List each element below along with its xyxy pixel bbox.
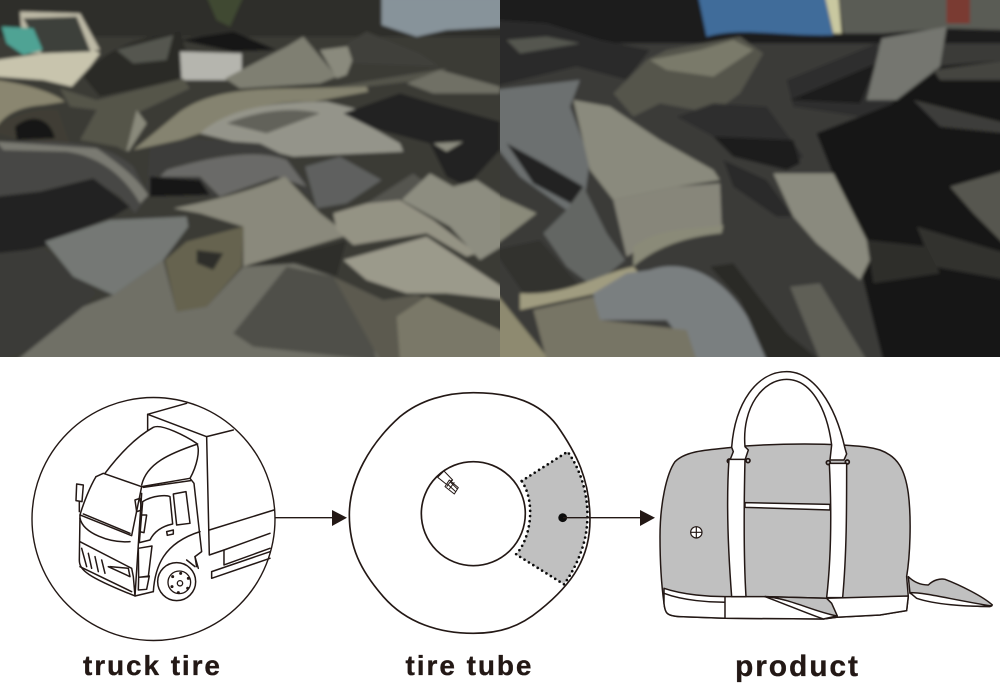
arrow: tire tube to product (558, 510, 655, 526)
cut section, dotted outline (516, 452, 587, 584)
eye button (691, 527, 702, 538)
panel: truck tire (32, 398, 347, 681)
panel: tire tube (349, 393, 655, 681)
photo: pile of used tire tubes (0, 0, 1000, 364)
bag bottom panel (664, 588, 908, 619)
panel: product (660, 372, 992, 683)
icon: truck line drawing (76, 403, 274, 601)
tube inner circle (421, 462, 525, 566)
icon: whale-shaped bag (660, 372, 992, 619)
photo right half (493, 0, 1000, 364)
arrow: truck tire to tire tube (275, 510, 347, 526)
icon: tire tube (349, 393, 590, 633)
straps (728, 459, 746, 597)
label: tire tube: tire tube (406, 650, 532, 681)
photo left half (0, 0, 507, 364)
bag tail (908, 577, 992, 607)
pocket zipper (745, 503, 830, 510)
bag fin (765, 597, 837, 619)
bag handle (730, 372, 847, 460)
label: product: product (735, 650, 858, 683)
bag body (660, 444, 910, 619)
truck circle outline (32, 398, 275, 640)
tube outer outline (349, 393, 590, 633)
valve (438, 471, 458, 494)
rings (727, 459, 849, 465)
label: truck tire: truck tire (83, 650, 220, 681)
